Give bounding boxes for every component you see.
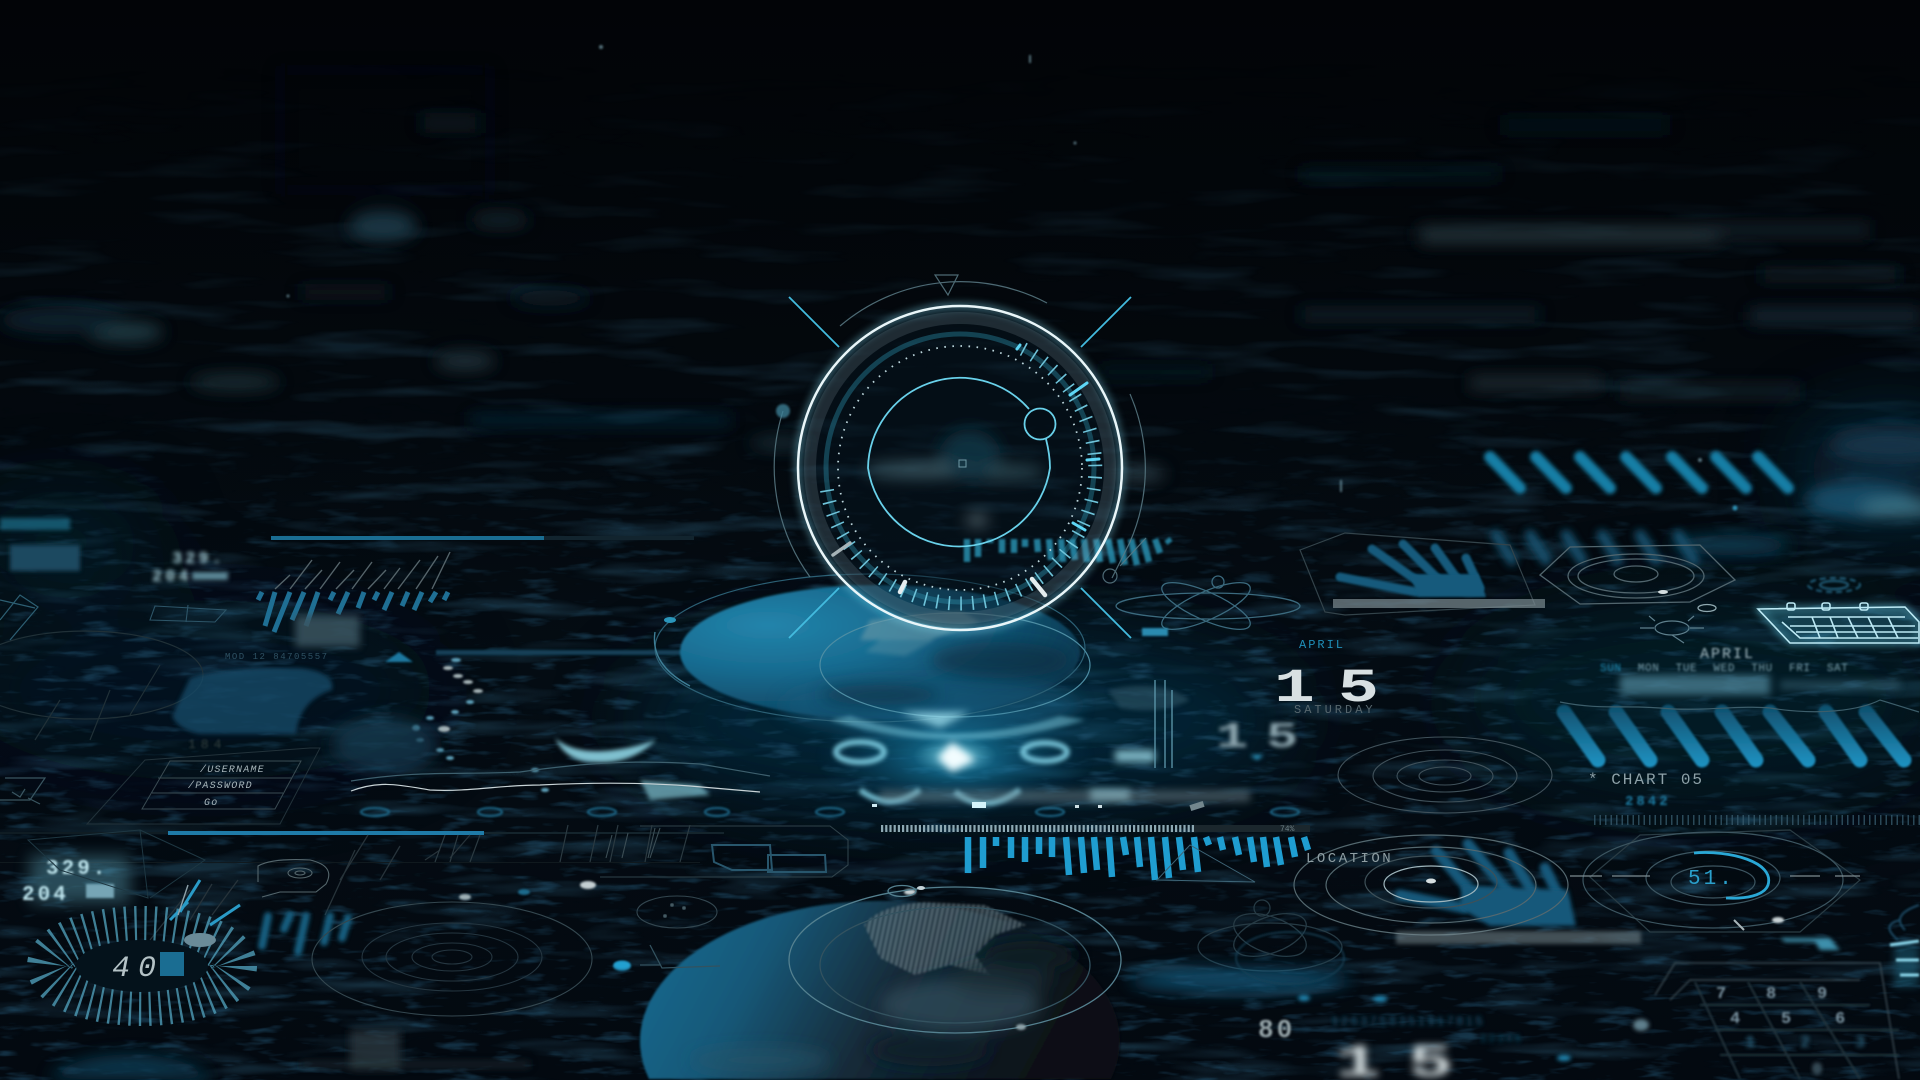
center square <box>959 460 966 467</box>
gray scan strip below glow <box>872 790 1250 811</box>
numeric readout left bright: 329. <box>46 858 108 881</box>
icon: lower hand scan <box>1400 844 1576 926</box>
cloud highlights left of glow <box>555 738 710 800</box>
left upper numeric readouts: 329. <box>172 550 225 569</box>
left upper numeric readouts <box>0 518 228 587</box>
panel: numeric keypad: 0 <box>1812 1061 1822 1080</box>
numeric readout left bright <box>22 855 130 907</box>
panel: login form <box>87 748 320 824</box>
outer arcs <box>774 275 1146 583</box>
panel: central HUD reticle <box>750 275 1170 638</box>
text: digit row: 12345 <box>1480 1034 1523 1046</box>
blurred far data blobs <box>0 70 1920 424</box>
panel: login form: /PASSWORD <box>188 780 253 792</box>
panel: numeric keypad: 7 <box>1716 985 1726 1004</box>
dark blue globe blur left <box>333 717 437 773</box>
node dots scattered <box>459 881 916 971</box>
small dim radial <box>1236 932 1344 984</box>
icon: brain head <box>172 668 332 734</box>
icon: head outline <box>258 860 329 897</box>
panel: numeric keypad: 8 <box>1766 985 1776 1004</box>
ticks strip right <box>1594 815 1920 825</box>
faint triangle overlay on bars <box>1157 845 1255 882</box>
icon: small orbit circle <box>637 896 717 928</box>
panel: lower globe <box>640 901 1120 1079</box>
panel: numeric keypad: 9 <box>1817 985 1827 1004</box>
ambient blue glow over the lower half <box>0 420 1920 810</box>
small gauge needle <box>178 885 188 915</box>
panel: login form: /USERNAME <box>200 764 265 776</box>
text: April calendar header: APRIL <box>1700 646 1755 663</box>
bottom left numbers blur <box>300 1030 530 1070</box>
panel: numeric keypad: 3 <box>1855 1034 1865 1053</box>
cyan note marker <box>1780 938 1840 950</box>
text: April calendar header <box>1600 646 1848 675</box>
dotted ring <box>838 346 1082 590</box>
panel: numeric keypad: 4 <box>1730 1010 1740 1029</box>
triangles mesh left <box>28 830 205 898</box>
bright ticks <box>833 345 1099 595</box>
calendar days blurred <box>1620 675 1900 695</box>
text: April date readout: SATURDAY <box>1294 703 1376 717</box>
icon: gear <box>1808 578 1860 592</box>
inner circle with knob <box>868 378 1056 546</box>
left scan circle <box>0 631 203 740</box>
panel: numeric keypad: 5 <box>1781 1010 1791 1029</box>
lens inner haze <box>750 429 1165 524</box>
panel: numeric keypad: 2 <box>1800 1034 1810 1053</box>
icon: upper hand scan <box>1300 533 1545 615</box>
progress tick strip <box>881 825 1310 834</box>
numeric readout left bright: 204 <box>22 884 69 907</box>
slanted lines left mid <box>150 835 470 940</box>
icon: contour radar left <box>312 902 592 1016</box>
icon: calendar <box>1758 603 1919 643</box>
panel: vertical ticks rows <box>435 825 690 862</box>
icon: octagon radar upper right <box>1540 545 1735 612</box>
icon: contour radar right <box>1338 737 1552 813</box>
blurred block under left bars <box>295 615 360 647</box>
text: April date readout <box>1274 638 1402 717</box>
small car outline left <box>150 605 226 622</box>
text: blurred date echo: 15 <box>1216 717 1316 758</box>
outer white ring <box>798 306 1122 630</box>
continent: north america <box>864 902 1026 975</box>
bottom left blurred globe <box>48 1055 212 1079</box>
text: April calendar header: SUN MON TUE WED THU FRI SAT <box>1600 663 1848 675</box>
lower left blue bars <box>262 915 348 952</box>
blue glow band right of globe <box>1130 968 1350 992</box>
lower globe dark continents <box>690 941 1075 1072</box>
central light burst <box>815 680 1172 818</box>
teal inner ring <box>826 334 1094 602</box>
text: April date readout: 15 <box>1274 663 1402 716</box>
radar: gauge 51 <box>1570 830 1860 932</box>
gauge: 40 radial: 40 <box>112 952 164 986</box>
reticle dark lens <box>800 308 1120 628</box>
gauge: 40 radial <box>50 880 240 1003</box>
panel: numeric keypad: 1 <box>1745 1034 1755 1053</box>
right edge swirl <box>1670 431 1920 555</box>
gray glass band <box>810 318 1110 618</box>
radar: gauge 51: 51. <box>1688 868 1735 891</box>
icon: atom <box>1116 574 1300 638</box>
icon: corner panel cyan <box>1890 941 1919 987</box>
text: chart 05: * CHART 05 <box>1588 771 1704 789</box>
right side circle arcs <box>1889 905 1919 940</box>
panel: mid left blue rule <box>0 831 724 863</box>
gray strip under hand <box>1396 931 1641 944</box>
text: chart 05 <box>1588 771 1704 810</box>
radar: location <box>1294 835 1568 935</box>
text: blurred date echo <box>1216 717 1316 760</box>
icon: DNA helix <box>412 658 549 792</box>
ring glow <box>798 306 1122 630</box>
panel: blurred middle bars right <box>1496 535 1694 560</box>
panel: large slanted blue bar chart <box>1560 700 1919 760</box>
text: left panel code: MOD 12 84705557 <box>225 652 329 662</box>
panel: truck frame <box>600 826 848 877</box>
text: chart 05: 2842 <box>1625 794 1671 810</box>
text: April date readout: APRIL <box>1299 638 1345 652</box>
progress tick strip: 74% <box>1280 825 1295 834</box>
text: digit row: 1263758351117815 <box>1331 1014 1485 1029</box>
panel: upper globe disk <box>654 574 1090 735</box>
lower globe rings <box>614 886 1121 1033</box>
cross lines <box>789 297 1131 638</box>
radar: location: LOCATION <box>1306 851 1393 867</box>
text: 80 readout: 80 <box>1258 1015 1295 1045</box>
line chart wave <box>351 762 770 792</box>
panel: top left blue rule <box>271 536 694 540</box>
text: head caption: 184 <box>188 737 226 752</box>
bar chart: central blue bars <box>968 837 1308 880</box>
upper globe continents <box>860 610 1190 710</box>
blue top panel marks <box>385 650 716 662</box>
upper teal bars inside reticle <box>967 539 1170 565</box>
icon: light bulb <box>1640 616 1704 643</box>
tick arc <box>827 346 1095 604</box>
panel: login form: Go <box>204 798 218 809</box>
small glints in the dark sky <box>286 45 1738 510</box>
panel: numeric keypad <box>1655 963 1899 1080</box>
small node circles row <box>361 808 1299 816</box>
left upper numeric readouts: 204 <box>152 568 192 587</box>
icon: atom lower right <box>1198 900 1342 971</box>
panel: numeric keypad: 6 <box>1835 1010 1845 1029</box>
panel: left tick chart and bars <box>258 552 450 632</box>
left edge icon <box>0 595 45 804</box>
grit texture of distant interface detail <box>0 444 1920 1080</box>
left ring node <box>776 404 790 418</box>
panel: upper slanted blue bars <box>1490 457 1788 488</box>
text: digit row <box>1298 995 1649 1061</box>
